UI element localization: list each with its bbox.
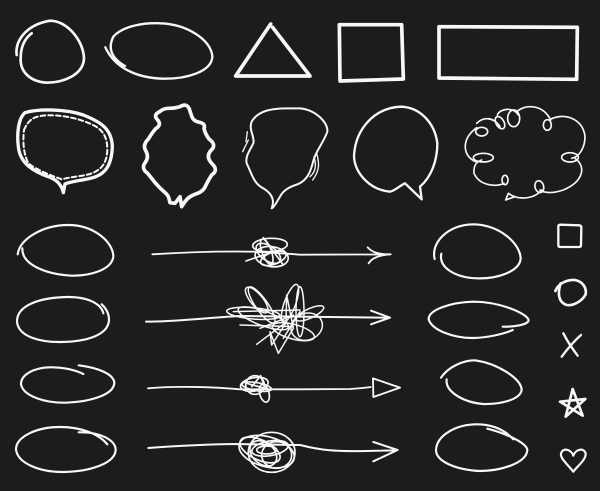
icon: wide rectangle [439,27,577,79]
icon: small circle [555,280,586,305]
icon: cross [562,333,581,357]
speech bubble: round [354,107,437,199]
icon: heart [561,450,586,472]
icon: hand-drawn circle [16,21,84,83]
thought cloud with loops [465,107,585,200]
hand-drawn ovals, left column [16,225,116,472]
icon: square [339,25,403,81]
icon: small square [558,225,581,247]
arrow 1 with tangle [152,237,391,269]
arrow 3 with small tangle, triangle head [148,375,400,403]
arrow 4 with round tangle [148,430,398,473]
icon: star [560,389,585,417]
icon: hand-drawn ellipse [105,23,212,79]
arrow 2 with big scribble [146,283,390,353]
speech bubble: stitched [18,110,112,193]
icon: triangle [236,24,310,76]
hand-drawn ovals, right column [429,224,529,471]
speech bubble: wavy [143,105,215,207]
speech bubble: thin with marks [243,108,327,208]
